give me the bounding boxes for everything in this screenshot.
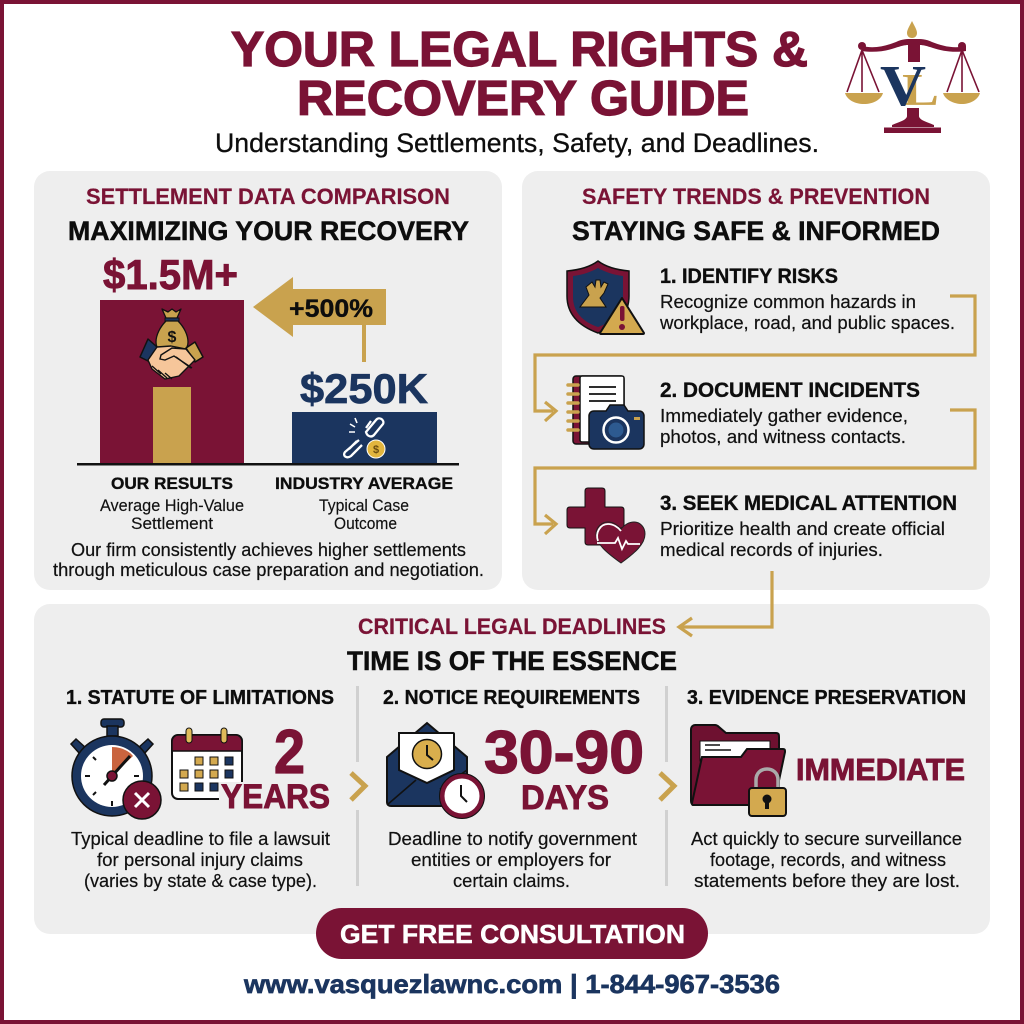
title: RECOVERY GUIDE [297,72,749,126]
button: get free consultation [316,908,708,959]
icon: scales of justice logo: L [902,64,939,115]
column 1 heading: 1. STATUTE OF LIMITATIONS [66,687,334,709]
divider and chevron 2 [660,686,674,886]
text: column 3 description: statements before they are lost. [694,871,960,891]
step 3 text: 3. SEEK MEDICAL ATTENTION [660,492,957,515]
column 2 heading: 2. NOTICE REQUIREMENTS [383,687,640,709]
icon: money bag and handshake [140,309,203,379]
label: our results [100,474,244,533]
text: column 3 description [691,829,962,891]
icon: shield with warning [567,261,644,334]
icon: scales of justice logo: V [880,53,926,118]
arrow: step 3 to deadlines [679,571,772,636]
title: YOUR LEGAL RIGHTS & [231,23,808,77]
icon: medical cross and heart [567,488,645,563]
text: column 2 description: entities or employers for [411,850,611,870]
label: our results: Settlement [131,514,213,533]
text: firm summary: Our firm consistently achieves higher settlements [71,540,466,560]
icon: notebook and camera [568,376,644,449]
value: 2 years [219,718,330,816]
step 2 text: 2. DOCUMENT INCIDENTS [660,379,920,402]
icon: broken chain and coin [344,418,385,458]
step 2 text: photos, and witness contacts. [660,427,906,447]
subtitle: Understanding Settlements, Safety, and Deadlines. [215,128,819,158]
step 2 text: Immediately gather evidence, [660,406,908,426]
step 1 text: 1. IDENTIFY RISKS [660,265,838,288]
text: column 1 description: Typical deadline to file a lawsuit [71,829,330,849]
step 1 text [659,265,955,333]
divider and chevron 1 [351,686,365,886]
icon: scales of justice logo [845,21,980,133]
step 2 text [660,379,920,447]
arrow: +500% comparison: +500% [289,295,373,323]
panel subheading: TIME IS OF THE ESSENCE [347,646,677,676]
icon: envelope with clock [387,723,484,818]
text: column 2 description [388,829,637,891]
step 1 text: workplace, road, and public spaces. [659,313,955,333]
bar: our results [100,300,244,463]
value: 30-90 days: DAYS [521,779,609,817]
panel subheading: STAYING SAFE & INFORMED [572,216,940,246]
label: our results: OUR RESULTS [111,474,233,493]
panel heading: SAFETY TRENDS & PREVENTION [582,184,930,209]
label: industry average: Outcome [334,514,397,533]
value: 2 years: 2 [274,718,305,787]
panel subheading: MAXIMIZING YOUR RECOVERY [68,216,469,246]
icon: stopwatch [71,719,161,819]
text: column 1 description [71,829,330,891]
text: column 2 description: Deadline to notify government [388,829,637,849]
value: industry average: $250K [300,365,428,412]
panel heading: SETTLEMENT DATA COMPARISON [86,184,450,209]
arrow: step 2 to step 3 [535,410,975,534]
value: immediate: IMMEDIATE [796,752,965,787]
column 3 heading: 3. EVIDENCE PRESERVATION [687,687,966,709]
step 3 text: medical records of injuries. [660,540,883,560]
value: 2 years: YEARS [221,778,330,816]
arrow: step 1 to step 2 [535,296,975,421]
step 3 text [660,492,957,560]
text: column 3 description: Act quickly to secure surveillance [691,829,962,849]
icon: money bag and handshake: $ [168,329,177,346]
label: industry average [275,474,453,533]
step 3 text: Prioritize health and create official [660,519,945,539]
text: column 3 description: footage, records, and witness [710,850,946,870]
text: column 1 description: for personal injury claims [97,850,303,870]
step 1 text: Recognize common hazards in [660,292,916,312]
inner gold bar [153,387,191,463]
icon: folder with padlock [691,725,786,816]
button: get free consultation: GET FREE CONSULTATION [340,919,685,949]
value: 30-90 days [484,719,644,817]
panel: critical legal deadlines [34,604,990,934]
arrow: +500% comparison [253,277,386,362]
panel heading: CRITICAL LEGAL DEADLINES [358,614,666,639]
label: industry average: Typical Case [319,496,409,515]
panel: settlement data comparison [34,171,502,590]
panel: safety trends [522,171,990,590]
label: our results: Average High-Value [100,496,244,515]
text: firm summary: through meticulous case preparation and negotiation. [53,560,484,580]
bar: industry average [292,412,437,463]
title [231,23,808,126]
icon: calendar [172,728,242,799]
value: 30-90 days: 30-90 [484,719,644,786]
label: industry average: INDUSTRY AVERAGE [275,474,453,493]
text: column 1 description: (varies by state & case type). [84,871,317,891]
value: our results: $1.5M+ [103,251,238,298]
chart baseline [77,463,459,466]
icon: broken chain and coin: $ [373,444,379,456]
text: firm summary [53,540,484,580]
text: column 2 description: certain claims. [453,871,570,891]
footer contact: www.vasquezlawnc.com | 1-844-967-3536 [243,969,780,999]
